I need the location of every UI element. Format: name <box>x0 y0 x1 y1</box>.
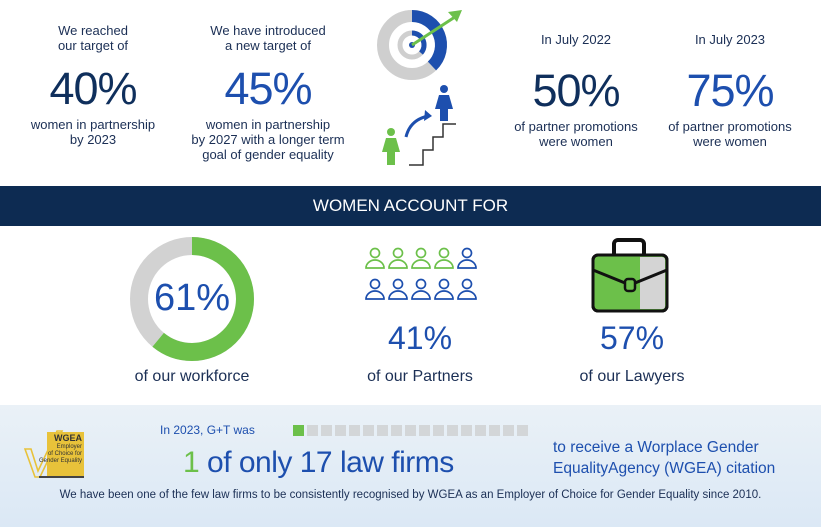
icon: WGEA badge: of Choice for <box>48 451 82 457</box>
panel: WGEA citation <box>0 405 821 527</box>
stat: 40%: 40% <box>49 63 137 114</box>
donut: 61% workforce: 61% <box>154 277 230 319</box>
stat: 75%: 75% <box>686 65 774 116</box>
donut: 61% workforce: of our workforce <box>135 368 249 385</box>
briefcase: 57% lawyers: of our Lawyers <box>580 368 684 385</box>
icon: WGEA badge: Gender Equality <box>39 458 82 464</box>
icon: target and career steps <box>377 10 462 166</box>
header bar: women account for <box>0 186 821 226</box>
stat: 50%: 50% <box>532 65 620 116</box>
stat: 75% <box>668 32 792 149</box>
stat: 50% <box>514 32 638 149</box>
stat: 75%: were women <box>693 134 767 149</box>
stat: 45%: goal of gender equality <box>202 147 334 162</box>
panel: WGEA citation: EqualityAgency (WGEA) citation <box>553 460 775 477</box>
panel: WGEA citation: to receive a Worplace Gender <box>553 439 759 456</box>
stat: 45%: 45% <box>224 63 312 114</box>
donut: 61% workforce <box>130 237 254 385</box>
stat: 45%: by 2027 with a longer term <box>191 132 345 147</box>
stat: 40%: We reached <box>58 23 128 38</box>
stat: 45%: We have introduced <box>210 23 326 38</box>
stat: 45%: women in partnership <box>206 117 330 132</box>
stat: 50%: of partner promotions <box>514 119 638 134</box>
stat: 40%: women in partnership <box>31 117 155 132</box>
stat: 40% <box>30 23 155 147</box>
icon: WGEA badge: Employer <box>57 444 82 450</box>
panel: WGEA citation: 1 of only 17 law firms <box>183 446 454 479</box>
people icons: 41% partners: of our Partners <box>367 368 473 385</box>
panel: WGEA citation: We have been one of the few law firms to be consistently recognised by WGEA as an Employer of Choice for Gender Equality since 2010. <box>60 489 761 501</box>
chart: 1 of 17 squares <box>293 425 528 436</box>
stat: 45%: a new target of <box>225 38 311 53</box>
stat: 45% <box>191 23 345 162</box>
icon: WGEA badge <box>24 430 84 478</box>
panel: WGEA citation: In 2023, G+T was <box>160 423 255 437</box>
stat: 50%: were women <box>539 134 613 149</box>
header bar: women account for: WOMEN ACCOUNT FOR <box>313 196 508 215</box>
people icons: 41% partners <box>365 248 477 385</box>
stat: 50%: In July 2022 <box>541 32 611 47</box>
stat: 75%: In July 2023 <box>695 32 765 47</box>
icon: WGEA badge: WGEA <box>54 433 82 443</box>
people icons: 41% partners: 41% <box>388 320 452 356</box>
stat: 40%: our target of <box>58 38 128 53</box>
briefcase: 57% lawyers: 57% <box>600 320 664 356</box>
briefcase: 57% lawyers <box>580 238 684 385</box>
stat: 40%: by 2023 <box>70 132 116 147</box>
stat: 75%: of partner promotions <box>668 119 792 134</box>
